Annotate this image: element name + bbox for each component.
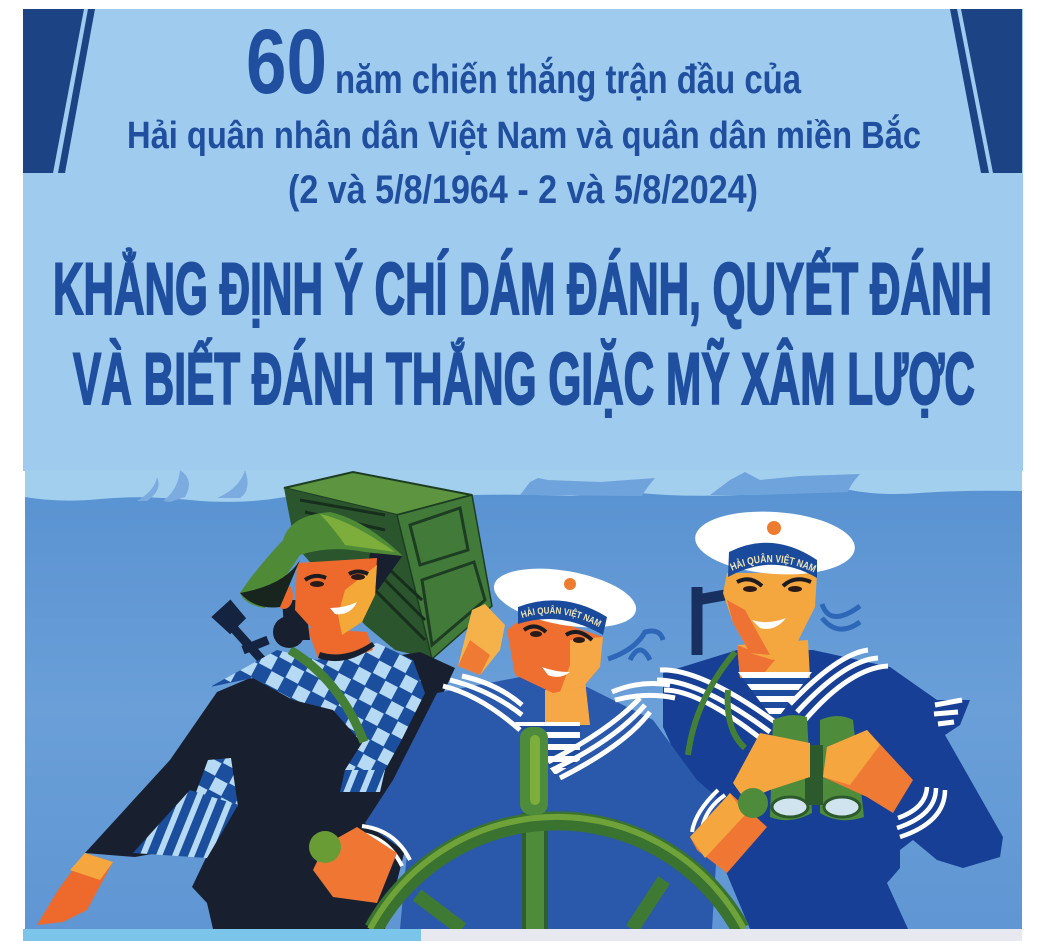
hands holding binoculars xyxy=(733,730,913,813)
header panel background xyxy=(23,9,1023,471)
bottom strip left xyxy=(23,929,421,941)
right sailor's face xyxy=(723,573,817,660)
right sailor's body xyxy=(663,650,1003,929)
woman's body xyxy=(85,652,455,929)
main title xyxy=(53,249,992,420)
illustration: sailors and militia woman at the ship's wheel xyxy=(25,470,1022,929)
right sailor's collar stripes xyxy=(657,650,962,742)
middle sailor's hat xyxy=(494,568,636,635)
distant warships xyxy=(520,472,860,496)
binoculars xyxy=(770,715,864,820)
heading line 2: Hải quân nhân dân Việt Nam và quân dân miền Bắc xyxy=(127,113,921,157)
anniversary heading xyxy=(127,11,921,212)
left corner ribbon xyxy=(23,9,95,173)
middle sailor's body xyxy=(365,677,720,929)
woman's face xyxy=(275,558,377,636)
middle sailor's left cuff stripes xyxy=(362,790,725,866)
date line: (2 và 5/8/1964 - 2 và 5/8/2024) xyxy=(288,168,758,212)
sky xyxy=(25,471,1022,502)
right sailor's binocular strap xyxy=(688,652,745,755)
right sailor's hat xyxy=(695,512,855,578)
right sailor's cap text: HẢI QUÂN VIỆT NAM xyxy=(730,553,816,572)
woman's green hat xyxy=(240,512,403,608)
right sailor's striped shirt xyxy=(738,672,812,722)
right sailor's cuff stripes xyxy=(897,787,945,837)
ship's wheel xyxy=(370,727,744,929)
right sailor's neck shading xyxy=(737,645,775,678)
right corner ribbon xyxy=(950,9,1022,173)
woman's hair xyxy=(273,553,403,661)
ammo box xyxy=(284,472,492,659)
woman's neck xyxy=(307,628,373,658)
wheel handle knobs xyxy=(309,788,768,863)
middle sailor's cap text: HẢI QUÂN VIỆT NAM xyxy=(520,605,602,627)
middle sailor's striped shirt xyxy=(515,722,580,775)
checked scarf xyxy=(133,643,425,858)
woman's raised hand xyxy=(458,604,505,675)
left fist on wheel xyxy=(313,827,397,903)
green strap xyxy=(290,650,364,742)
heading line 1: năm chiến thắng trận đầu của xyxy=(335,56,802,102)
ribbon waves xyxy=(608,604,860,660)
middle sailor's neck xyxy=(545,680,590,725)
sea xyxy=(25,490,1022,929)
pointing hand xyxy=(37,853,113,925)
distant sails xyxy=(137,470,248,502)
number 60: 60 xyxy=(246,11,327,113)
right sailor's rifle xyxy=(697,587,725,655)
rifle behind the woman xyxy=(218,606,268,660)
middle sailor's collar stripes xyxy=(443,676,675,778)
bottom strip right xyxy=(421,929,1022,941)
middle sailor's face xyxy=(507,612,603,693)
right sailor's neck xyxy=(737,640,810,678)
right fist on wheel xyxy=(690,793,767,873)
